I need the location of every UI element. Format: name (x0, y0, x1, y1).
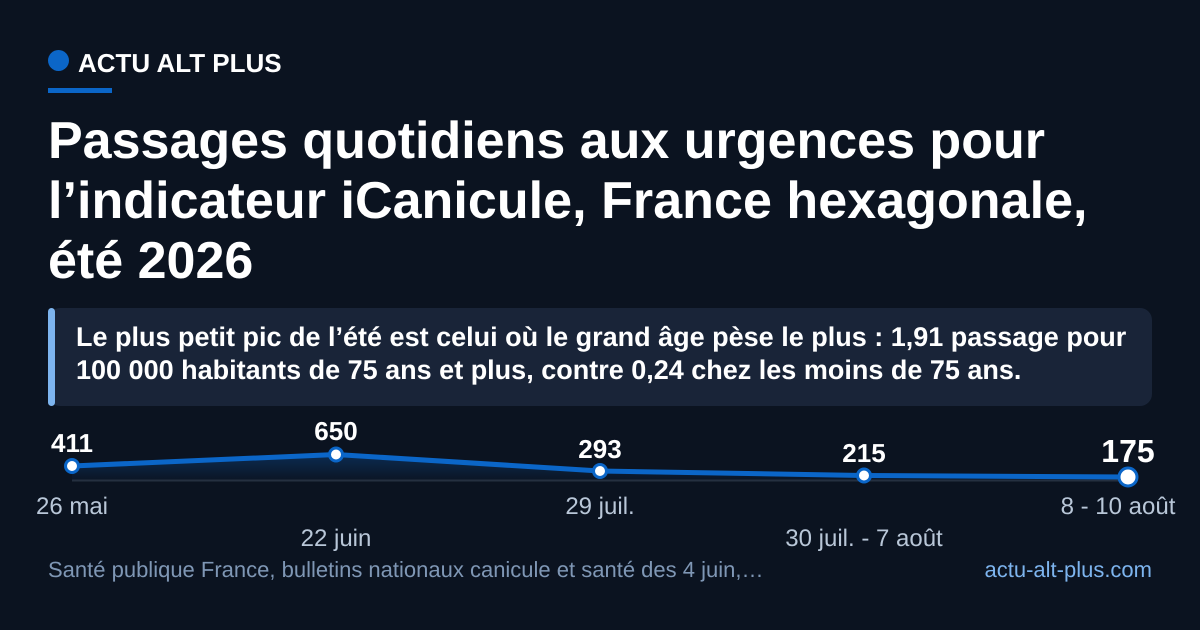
point: 29 juil.: 29 juil. (565, 493, 635, 520)
brand underline (48, 88, 112, 93)
point: 29 juil. (565, 434, 635, 520)
icon: brand dot (48, 50, 69, 71)
point: 30 juil. - 7 août: 30 juil. - 7 août (785, 525, 943, 552)
brand name: ACTU ALT PLUS (78, 48, 282, 78)
point: 8 - 10 août (1061, 433, 1176, 520)
title (48, 112, 1088, 290)
line chart (36, 420, 1176, 552)
title: été 2026 (48, 232, 253, 290)
takeaway text: Le plus petit pic de l’été est celui où le grand âge pèse le plus : 1,91 passage pour (76, 322, 1126, 352)
point: 26 mai (36, 428, 108, 520)
title: Passages quotidiens aux urgences pour (48, 112, 1045, 170)
title: l’indicateur iCanicule, France hexagonale, (48, 172, 1088, 230)
point: 26 mai: 26 mai (36, 493, 108, 520)
chart baseline (72, 480, 1128, 482)
point: 8 - 10 août: 8 - 10 août (1061, 493, 1176, 520)
point: 26 mai: 411 (51, 428, 93, 458)
point: 22 juin (301, 416, 371, 552)
point: 22 juin: 22 juin (301, 525, 371, 552)
takeaway text: 100 000 habitants de 75 ans et plus, contre 0,24 chez les moins de 75 ans. (76, 355, 1021, 385)
chart area fill (72, 454, 1128, 480)
panel accent bar (48, 308, 55, 406)
source note: Santé publique France, bulletins nationaux canicule et santé des 4 juin,… (48, 557, 763, 582)
point: 8 - 10 août: 175 (1101, 433, 1155, 469)
point: 30 juil. - 7 août (785, 438, 943, 552)
point: 30 juil. - 7 août: 215 (842, 438, 886, 468)
point: 29 juil.: 293 (578, 434, 622, 464)
data line (72, 454, 1128, 477)
panel: key takeaway (48, 308, 1152, 406)
takeaway text (76, 322, 1126, 385)
brand header (48, 48, 282, 93)
site link: actu-alt-plus.com (984, 557, 1152, 582)
